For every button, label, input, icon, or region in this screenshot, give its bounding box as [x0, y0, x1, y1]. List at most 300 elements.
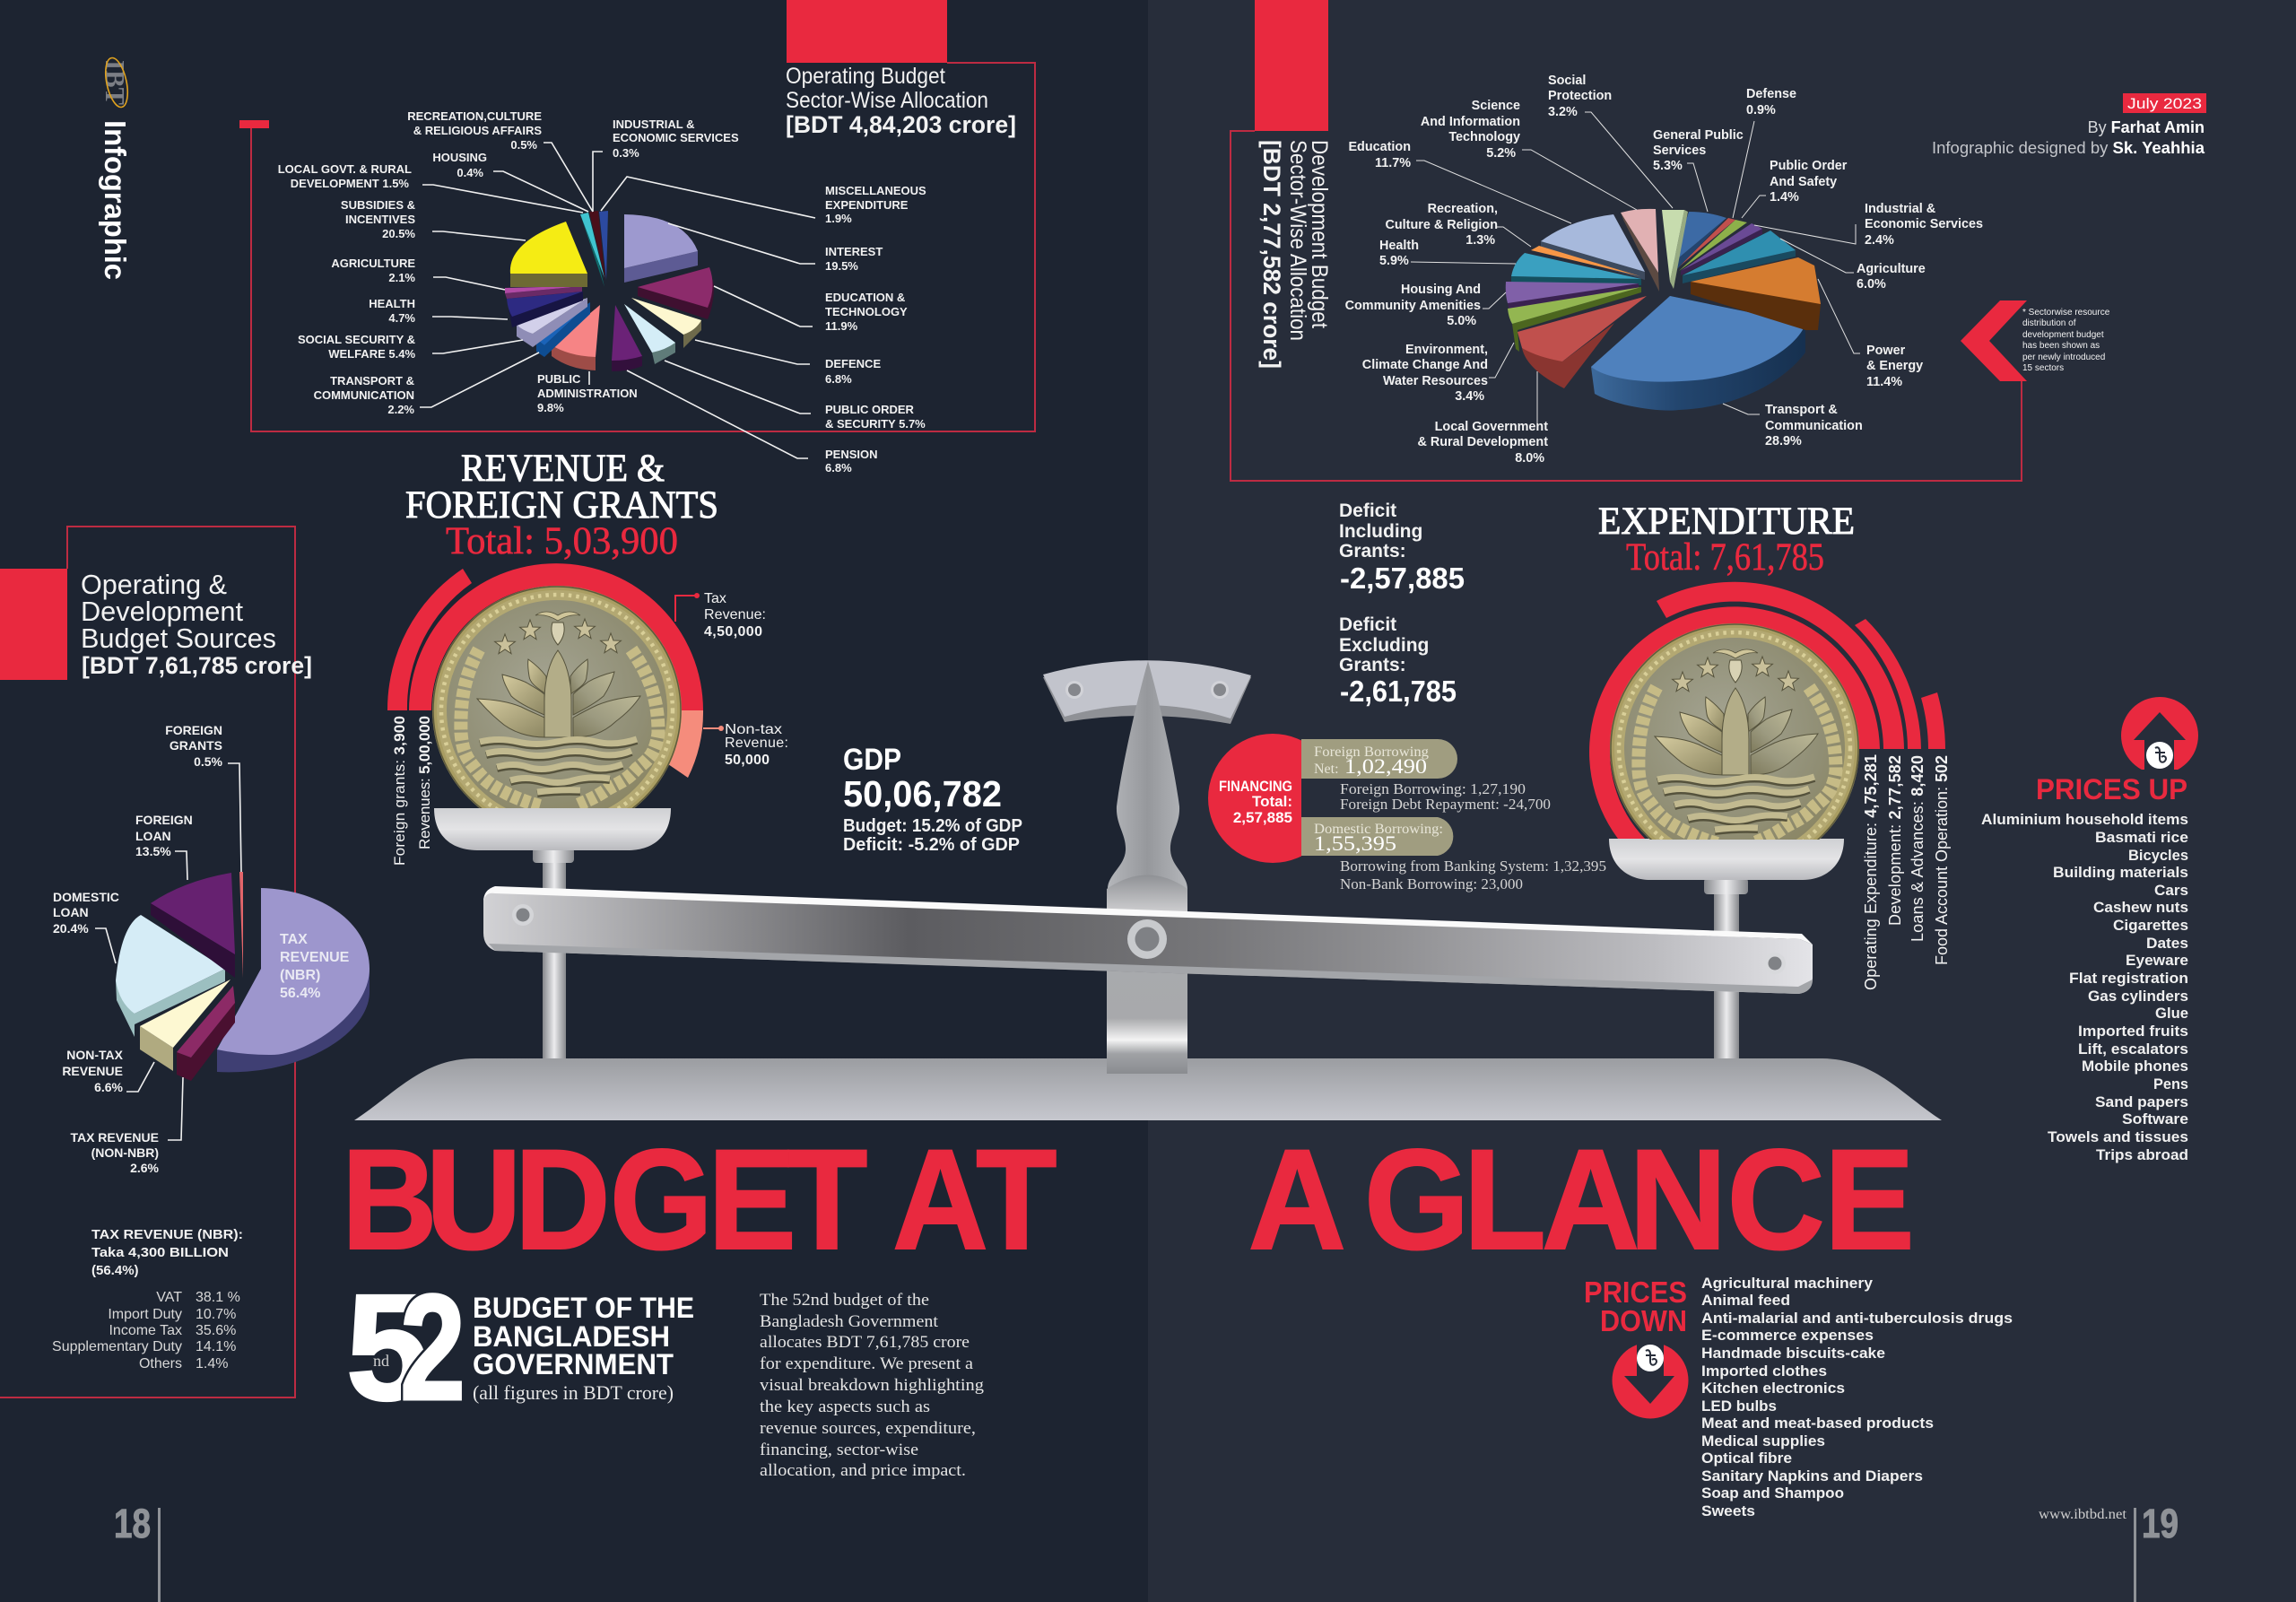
list of items: Mobile phones: [2082, 1058, 2188, 1075]
sector labels: 28.9%: [1765, 434, 1802, 448]
sector labels: HOUSING: [432, 151, 487, 164]
sector labels: Economic Services: [1865, 217, 1983, 231]
NBR tax breakdown: Income Tax: [109, 1323, 182, 1338]
sector labels: 11.9%: [825, 319, 858, 333]
foreign borrowing details: Foreign Borrowing: 1,27,190: [1340, 780, 1526, 797]
sector labels: INDUSTRIAL &: [613, 118, 694, 131]
sector labels: Transport &: [1765, 403, 1838, 417]
sector labels: 2.1%: [388, 271, 415, 284]
page number 19 and website: [2039, 1501, 2179, 1602]
central pointer: [1108, 661, 1187, 889]
panel: development budget sector-wise allocation: [1231, 0, 2110, 481]
3D pie chart: [1506, 209, 1821, 411]
list of items: Soap and Shampoo: [1701, 1484, 1844, 1502]
domestic borrowing details: [1340, 858, 1606, 892]
list of items: Imported clothes: [1701, 1363, 1827, 1380]
top arc plate: [1043, 660, 1251, 724]
list of items: Gas cylinders: [2088, 988, 2188, 1005]
leader lines: [95, 763, 241, 1140]
NBR tax breakdown: 35.6%: [196, 1323, 236, 1338]
intro paragraph: The 52nd budget of the: [760, 1291, 929, 1310]
sector labels: Culture & Religion: [1385, 218, 1498, 232]
source labels: REVENUE: [280, 950, 350, 965]
list of items: Kitchen electronics: [1701, 1380, 1845, 1397]
NBR tax breakdown: 1.4%: [196, 1356, 228, 1371]
NBR tax breakdown: TAX REVENUE (NBR):: [91, 1227, 243, 1242]
coin: [432, 586, 682, 808]
NBR tax breakdown: Import Duty: [108, 1307, 182, 1322]
sector labels: Industrial &: [1865, 202, 1935, 216]
list of items: Handmade biscuits-cake: [1701, 1345, 1885, 1362]
list of items: Cigarettes: [2113, 917, 2188, 934]
intro paragraph: allocates BDT 7,61,785 crore: [760, 1333, 970, 1352]
development arc: [1657, 582, 1904, 749]
sector labels: HEALTH: [369, 297, 415, 310]
sector labels: [278, 109, 926, 475]
domestic borrowing pill: [1301, 817, 1453, 856]
list of items: Pens: [2153, 1075, 2188, 1093]
tax revenue callout: Tax: [704, 591, 726, 606]
prices up: [1981, 697, 2198, 1163]
prices up heading: PRICES UP: [2036, 773, 2187, 805]
NBR tax breakdown: [52, 1227, 243, 1371]
arc labels: [1862, 754, 1951, 990]
sector labels: DEFENCE: [825, 357, 881, 370]
source labels: TAX REVENUE: [70, 1130, 159, 1145]
list of items: E-commerce expenses: [1701, 1327, 1874, 1344]
tax revenue arc: [409, 563, 703, 710]
source labels: NON-TAX: [66, 1048, 124, 1062]
red marker: [239, 120, 269, 128]
sector labels: 1.4%: [1770, 190, 1799, 205]
red tab: [1255, 0, 1328, 131]
budget heading: BANGLADESH: [473, 1320, 670, 1353]
arc labels: [391, 716, 433, 866]
sector labels: RECREATION,CULTURE: [407, 109, 542, 123]
page number 19 and website: www.ibtbd.net: [2039, 1507, 2127, 1522]
panel heading: Operating &: [81, 569, 227, 600]
sector labels: General Public: [1653, 128, 1744, 143]
list of items: Cars: [2154, 882, 2188, 899]
foreign borrowing pill: [1301, 739, 1457, 779]
source labels: (NBR): [280, 968, 320, 983]
deficit including grants: Grants:: [1339, 541, 1406, 562]
page number 18: [114, 1501, 161, 1602]
domestic borrowing details: Borrowing from Banking System: 1,32,395: [1340, 858, 1606, 875]
intro paragraph: allocation, and price impact.: [760, 1461, 966, 1480]
sector labels: PUBLIC: [537, 372, 581, 386]
number 52: 5: [346, 1263, 429, 1432]
financing circle: FINANCING: [1219, 778, 1292, 795]
panel heading: [BDT 2,77,582 crore]: [1258, 140, 1285, 369]
arc labels: Revenues: 5,00,000: [416, 716, 433, 849]
GDP block: 50,06,782: [843, 773, 1002, 814]
panel heading: [81, 569, 312, 679]
prices down heading: PRICES: [1584, 1276, 1687, 1309]
source labels: [53, 723, 350, 1175]
footnote: development budget: [2022, 330, 2104, 340]
sector labels: EXPENDITURE: [825, 198, 909, 212]
sector labels: 1.9%: [825, 212, 852, 225]
tax revenue callout: [675, 591, 766, 640]
operating expenditure arc: [1589, 606, 1880, 839]
panel heading: Budget Sources: [81, 623, 276, 654]
foreign borrowing pill: Foreign Borrowing: [1314, 744, 1429, 760]
footnote: * Sectorwise resource: [2022, 308, 2110, 318]
logo: 52nd budget: [346, 1263, 694, 1432]
sector labels: 5.9%: [1379, 254, 1409, 268]
NBR tax breakdown: Supplementary Duty: [52, 1339, 182, 1354]
footnote: has been shown as: [2022, 341, 2100, 351]
revenue and foreign grants heading: [405, 448, 718, 562]
source labels: FOREIGN: [135, 813, 193, 827]
main title: [342, 1119, 1915, 1279]
list of items: Sand papers: [2095, 1093, 2188, 1110]
panel frame: [0, 527, 295, 1397]
sector labels: Power: [1866, 344, 1906, 358]
brand: IBT Infographic: IBT: [100, 60, 131, 105]
revenue and foreign grants heading: Total: 5,03,900: [446, 520, 678, 562]
sector labels: Technology: [1448, 130, 1520, 144]
financing circle: 2,57,885: [1233, 809, 1292, 826]
sector labels: 2.2%: [387, 403, 414, 416]
sector labels: And Information: [1421, 115, 1520, 129]
intro paragraph: the key aspects such as: [760, 1397, 930, 1416]
domestic borrowing pill: 1,55,395: [1314, 832, 1396, 855]
list of items: Animal feed: [1701, 1292, 1790, 1309]
date badge: July 2023: [2127, 95, 2202, 112]
sector labels: 6.8%: [825, 372, 852, 386]
list of items: Dates: [2146, 935, 2188, 952]
footnote: distribution of: [2022, 318, 2076, 328]
number 52: 2: [400, 1263, 465, 1432]
NBR tax breakdown: 10.7%: [196, 1307, 236, 1322]
brand: IBT Infographic: Infographic: [99, 120, 132, 280]
sector labels: COMMUNICATION: [314, 388, 414, 402]
date badge: [2123, 93, 2206, 113]
footnote: [2022, 308, 2110, 373]
tax revenue callout: 4,50,000: [704, 624, 762, 640]
deficit excluding grants: Grants:: [1339, 655, 1406, 675]
sector labels: Social: [1548, 74, 1586, 88]
deficit including grants: Including: [1339, 521, 1422, 542]
sector labels: Defense: [1746, 87, 1796, 101]
intro paragraph: revenue sources, expenditure,: [760, 1419, 976, 1438]
sector labels: AGRICULTURE: [331, 257, 415, 270]
sector labels: INCENTIVES: [345, 213, 415, 226]
sector labels: Science: [1472, 99, 1520, 113]
sector labels: 0.4%: [457, 166, 483, 179]
source labels: 6.6%: [94, 1080, 124, 1094]
sector labels: SOCIAL SECURITY &: [298, 333, 415, 346]
foreign borrowing details: [1340, 780, 1551, 813]
sector labels: WELFARE 5.4%: [328, 347, 415, 361]
sector labels: Agriculture: [1857, 262, 1926, 276]
sector labels: Services: [1653, 144, 1706, 158]
sector labels: & RELIGIOUS AFFAIRS: [413, 124, 542, 137]
leader lines: [420, 143, 815, 458]
sector labels: & SECURITY 5.7%: [825, 417, 926, 431]
sector labels: 0.5%: [510, 138, 537, 152]
GDP block: Budget: 15.2% of GDP: [843, 816, 1022, 836]
domestic borrowing details: Non-Bank Borrowing: 23,000: [1340, 875, 1523, 892]
3D pie chart: [116, 872, 370, 1081]
right pan stem: [1704, 878, 1748, 1058]
sector labels: Climate Change And: [1362, 358, 1488, 372]
list of items: Anti-malarial and anti-tuberculosis drugs: [1701, 1310, 2013, 1327]
list of items: Sanitary Napkins and Diapers: [1701, 1467, 1923, 1484]
expenditure heading: [1598, 501, 1855, 579]
list of items: Imported fruits: [2078, 1023, 2188, 1040]
icon: up arrow with taka: [2121, 697, 2198, 774]
list of items: Agricultural machinery: [1701, 1275, 1874, 1292]
deficit excluding grants: -2,61,785: [1340, 675, 1457, 708]
sector labels: Water Resources: [1383, 374, 1488, 388]
intro paragraph: [760, 1291, 985, 1480]
source labels: LOAN: [53, 905, 89, 919]
coin: [1610, 623, 1859, 840]
non-tax revenue callout: Revenue:: [725, 736, 788, 751]
red tab: [787, 0, 947, 63]
loans and advances arc: [1855, 619, 1921, 749]
deficit excluding grants: Excluding: [1339, 635, 1429, 656]
arc labels: Food Account Operation: 502: [1933, 755, 1951, 965]
credits: [1932, 93, 2206, 157]
source labels: FOREIGN: [165, 723, 222, 737]
source labels: 0.5%: [194, 754, 223, 769]
sector labels: EDUCATION &: [825, 291, 905, 304]
deficit including grants: [1339, 501, 1465, 595]
list of items: Bicycles: [2128, 847, 2188, 864]
sector labels: Health: [1379, 239, 1419, 253]
arc labels: Foreign grants: 3,900: [391, 716, 408, 866]
source labels: 13.5%: [135, 844, 171, 858]
sector labels: Community Amenities: [1345, 299, 1481, 313]
NBR tax breakdown: (56.4%): [91, 1263, 139, 1278]
balance scale: [354, 660, 1942, 1120]
sector labels: 3.2%: [1548, 105, 1578, 119]
budget heading: GOVERNMENT: [473, 1348, 674, 1380]
domestic borrowing pill: Domestic Borrowing:: [1314, 822, 1443, 837]
sector labels: Communication: [1765, 419, 1863, 433]
sector labels: 19.5%: [825, 259, 858, 273]
footnote: per newly introduced: [2022, 353, 2105, 362]
red tab: [0, 569, 67, 680]
central column: [1107, 875, 1187, 1074]
panel heading: Sector-Wise Allocation: [1285, 140, 1310, 341]
list of items: Trips abroad: [2096, 1146, 2188, 1163]
page number 19 and website: 19: [2142, 1501, 2179, 1546]
sector labels: Local Government: [1435, 420, 1548, 434]
sector labels: TECHNOLOGY: [825, 305, 908, 318]
sector labels: TRANSPORT &: [330, 374, 414, 387]
tilted beam: [483, 886, 1813, 994]
chevron marker: [1961, 300, 2027, 381]
sector labels: 0.9%: [1746, 103, 1776, 118]
list of items: [1981, 811, 2188, 1163]
source labels: LOAN: [135, 829, 171, 843]
list of items: Software: [2122, 1110, 2188, 1127]
expenditure heading: Total: 7,61,785: [1626, 536, 1824, 579]
food account arc: [1921, 692, 1945, 749]
sector labels: 5.2%: [1486, 146, 1516, 161]
sector labels: 6.8%: [825, 461, 852, 475]
intro paragraph: Bangladesh Government: [760, 1312, 939, 1331]
sector labels: 20.5%: [382, 227, 415, 240]
intro paragraph: for expenditure. We present a: [760, 1354, 974, 1373]
foreign borrowing pill: 1,02,490: [1344, 755, 1427, 778]
budget heading: (all figures in BDT crore): [473, 1381, 674, 1404]
sector labels: SUBSIDIES &: [341, 198, 415, 212]
expenditure coin with arcs: [1589, 582, 1951, 990]
financing circle: [1208, 734, 1301, 863]
list of items: Glue: [2155, 1005, 2188, 1022]
sector labels: & Energy: [1866, 359, 1923, 373]
sector labels: PUBLIC ORDER: [825, 403, 915, 416]
deficit including grants: -2,57,885: [1340, 562, 1465, 595]
panel: operating budget sector-wise allocation: [239, 0, 1035, 475]
source labels: TAX: [280, 932, 308, 947]
GDP block: GDP: [843, 743, 901, 777]
panel heading: [BDT 7,61,785 crore]: [82, 652, 312, 679]
sector labels: 3.4%: [1455, 389, 1484, 404]
tax revenue callout: Revenue:: [704, 607, 766, 623]
revenue coin with arcs: [387, 563, 788, 866]
source labels: 56.4%: [280, 986, 320, 1001]
revenue and foreign grants heading: REVENUE &: [461, 448, 665, 490]
list of items: Flat registration: [2069, 970, 2188, 987]
panel frame: [1231, 131, 2022, 481]
author line: By Farhat Amin: [2088, 118, 2205, 136]
source labels: DOMESTIC: [53, 890, 119, 904]
non-tax revenue arc: [668, 710, 703, 778]
sector labels: Housing And: [1401, 283, 1481, 297]
list of items: Sweets: [1701, 1502, 1755, 1519]
financing circle: Total:: [1252, 793, 1292, 810]
prices down heading: [1584, 1276, 1687, 1337]
NBR tax breakdown: 38.1 %: [196, 1290, 240, 1305]
NBR tax breakdown: Others: [139, 1356, 182, 1371]
sector labels: And Safety: [1770, 175, 1837, 189]
budget heading: BUDGET OF THE: [473, 1292, 694, 1324]
sector labels: & Rural Development: [1417, 435, 1548, 449]
panel heading: Development Budget: [1307, 140, 1332, 328]
sector labels: 11.4%: [1866, 375, 1902, 389]
leader lines: [1411, 112, 1860, 431]
list of items: Medical supplies: [1701, 1432, 1825, 1450]
main title: BUDGET AT: [342, 1119, 1057, 1279]
list of items: Eyeware: [2126, 952, 2188, 969]
3D pie chart: [505, 211, 714, 371]
deficit including grants: Deficit: [1339, 501, 1396, 521]
expenditure heading: EXPENDITURE: [1598, 501, 1855, 543]
sector labels: Education: [1348, 140, 1411, 154]
NBR tax breakdown: Taka 4,300 BILLION: [91, 1245, 229, 1260]
prices down heading: DOWN: [1600, 1304, 1687, 1337]
panel frame: [251, 63, 1035, 431]
panel heading: [786, 64, 1016, 138]
panel heading: [BDT 4,84,203 crore]: [786, 111, 1016, 138]
left pan stem: [533, 848, 574, 1058]
foreign borrowing details: Foreign Debt Repayment: -24,700: [1340, 796, 1551, 813]
list of items: Aluminium household items: [1981, 811, 2188, 828]
sector labels: PENSION: [825, 448, 878, 461]
sector labels: Recreation,: [1428, 202, 1498, 216]
foreign borrowing pill: Net:: [1314, 762, 1339, 777]
sector labels: 9.8%: [537, 401, 564, 414]
scale base: [354, 1058, 1942, 1120]
list of items: LED bulbs: [1701, 1397, 1777, 1415]
left pan: [434, 808, 671, 850]
sector labels: 8.0%: [1515, 451, 1544, 466]
list of items: Optical fibre: [1701, 1450, 1792, 1467]
panel heading: Operating Budget: [786, 64, 945, 89]
budget heading: [473, 1292, 694, 1404]
sector labels: Public Order: [1770, 159, 1848, 173]
icon: down arrow with taka: [1613, 1340, 1688, 1419]
designer line: Infographic designed by Sk. Yeahhia: [1932, 139, 2205, 157]
source labels: 2.6%: [130, 1161, 160, 1175]
GDP block: [843, 743, 1022, 855]
sector labels: Environment,: [1405, 343, 1488, 357]
sector labels: MISCELLANEOUS: [825, 184, 926, 197]
panel: operating and development budget sources: [0, 527, 370, 1397]
panel heading: Sector-Wise Allocation: [786, 88, 988, 113]
intro paragraph: financing, sector-wise: [760, 1441, 918, 1459]
NBR tax breakdown: 14.1%: [196, 1339, 236, 1354]
main title: A GLANCE: [1248, 1119, 1915, 1279]
list of items: Towels and tissues: [2048, 1128, 2188, 1145]
sector labels: 2.4%: [1865, 233, 1894, 248]
GDP block: Deficit: -5.2% of GDP: [843, 835, 1020, 855]
NBR tax breakdown: VAT: [156, 1290, 182, 1305]
source labels: REVENUE: [62, 1064, 123, 1078]
non-tax revenue callout: [703, 722, 788, 768]
source labels: (NON-NBR): [91, 1145, 159, 1160]
right pan: [1609, 839, 1844, 880]
footnote: 15 sectors: [2022, 363, 2064, 373]
sector labels: DEVELOPMENT 1.5%: [291, 177, 409, 190]
list of items: Basmati rice: [2095, 829, 2188, 846]
deficit excluding grants: Deficit: [1339, 614, 1396, 635]
financing block: [1208, 734, 1606, 892]
source labels: GRANTS: [170, 738, 222, 753]
revenue and foreign grants heading: FOREIGN GRANTS: [405, 484, 718, 527]
list of items: Building materials: [2053, 864, 2188, 881]
sector labels: Protection: [1548, 89, 1612, 103]
non-tax revenue callout: 50,000: [725, 753, 770, 768]
number 52: nd: [373, 1352, 389, 1370]
sector labels: LOCAL GOVT. & RURAL: [278, 162, 412, 176]
non-tax revenue callout: Non-tax: [725, 722, 782, 737]
deficit excluding grants: [1339, 614, 1457, 708]
sector labels: 6.0%: [1857, 277, 1886, 292]
arc labels: Development: 2,77,582: [1886, 755, 1904, 926]
foreign grants arc: [387, 569, 472, 710]
number 52: 2: [400, 1263, 465, 1432]
arc labels: Loans & Advances: 8,420: [1909, 755, 1926, 942]
sector labels: 4.7%: [388, 311, 415, 325]
sector labels: [1345, 74, 1983, 466]
sector labels: 11.7%: [1375, 156, 1411, 170]
list of items: Cashew nuts: [2093, 899, 2188, 916]
sector labels: ADMINISTRATION: [537, 387, 638, 400]
sector labels: 1.3%: [1465, 233, 1495, 248]
page number 18: 18: [114, 1501, 151, 1546]
list of items: [1701, 1275, 2013, 1519]
sector labels: ECONOMIC SERVICES: [613, 131, 739, 144]
list of items: Lift, escalators: [2078, 1040, 2188, 1058]
